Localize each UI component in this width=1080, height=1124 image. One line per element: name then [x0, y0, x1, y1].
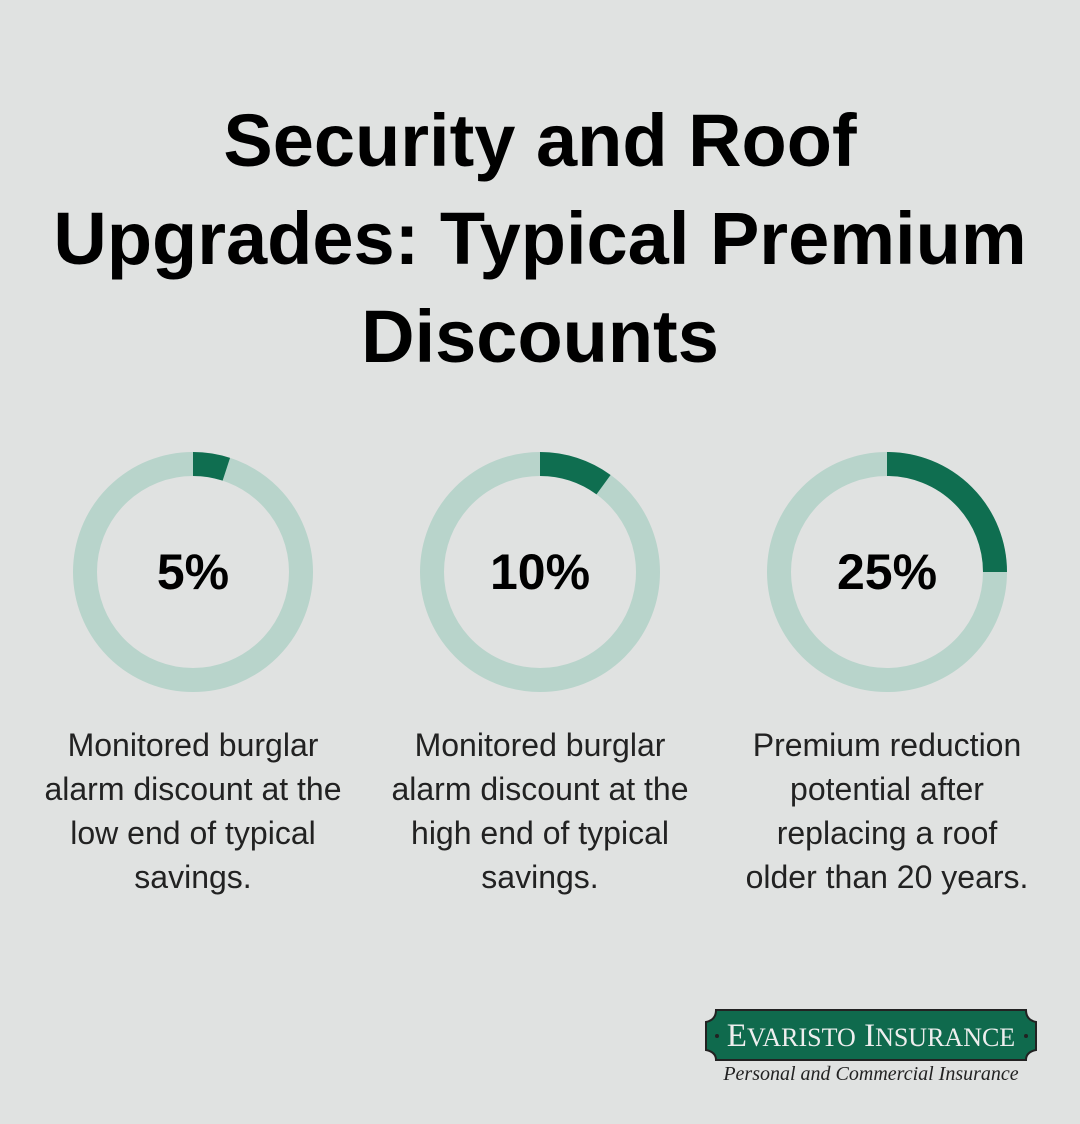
- description 3: potential after: [790, 771, 984, 807]
- donut: 10%: 10%: [490, 544, 590, 600]
- title: Upgrades: Typical Premium: [53, 197, 1027, 280]
- title: Discounts: [361, 295, 719, 378]
- description 1: Monitored burglar: [68, 727, 318, 763]
- donut: 25%: 25%: [837, 544, 937, 600]
- description 2: alarm discount at the: [391, 771, 689, 807]
- title: [53, 99, 1027, 378]
- description 2: [391, 727, 689, 895]
- description 3: replacing a roof: [777, 815, 997, 851]
- description 1: savings.: [134, 859, 252, 895]
- description 1: [44, 727, 342, 895]
- logo: EVARISTO INSURANCE: [727, 1018, 1015, 1054]
- donut: 10%: [420, 452, 660, 692]
- description 3: [746, 727, 1028, 895]
- description 3: Premium reduction: [753, 727, 1021, 763]
- donut: 5%: 5%: [157, 544, 229, 600]
- description 2: savings.: [481, 859, 599, 895]
- title: Security and Roof: [223, 99, 857, 182]
- description 2: Monitored burglar: [415, 727, 665, 763]
- description 2: high end of typical: [411, 815, 669, 851]
- logo: [705, 1009, 1037, 1085]
- donut: 25%: [767, 452, 1007, 692]
- description 1: alarm discount at the: [44, 771, 342, 807]
- logo: Personal and Commercial Insurance: [722, 1063, 1019, 1085]
- description 1: low end of typical: [70, 815, 316, 851]
- description 3: older than 20 years.: [746, 859, 1028, 895]
- donut: 5%: [73, 452, 313, 692]
